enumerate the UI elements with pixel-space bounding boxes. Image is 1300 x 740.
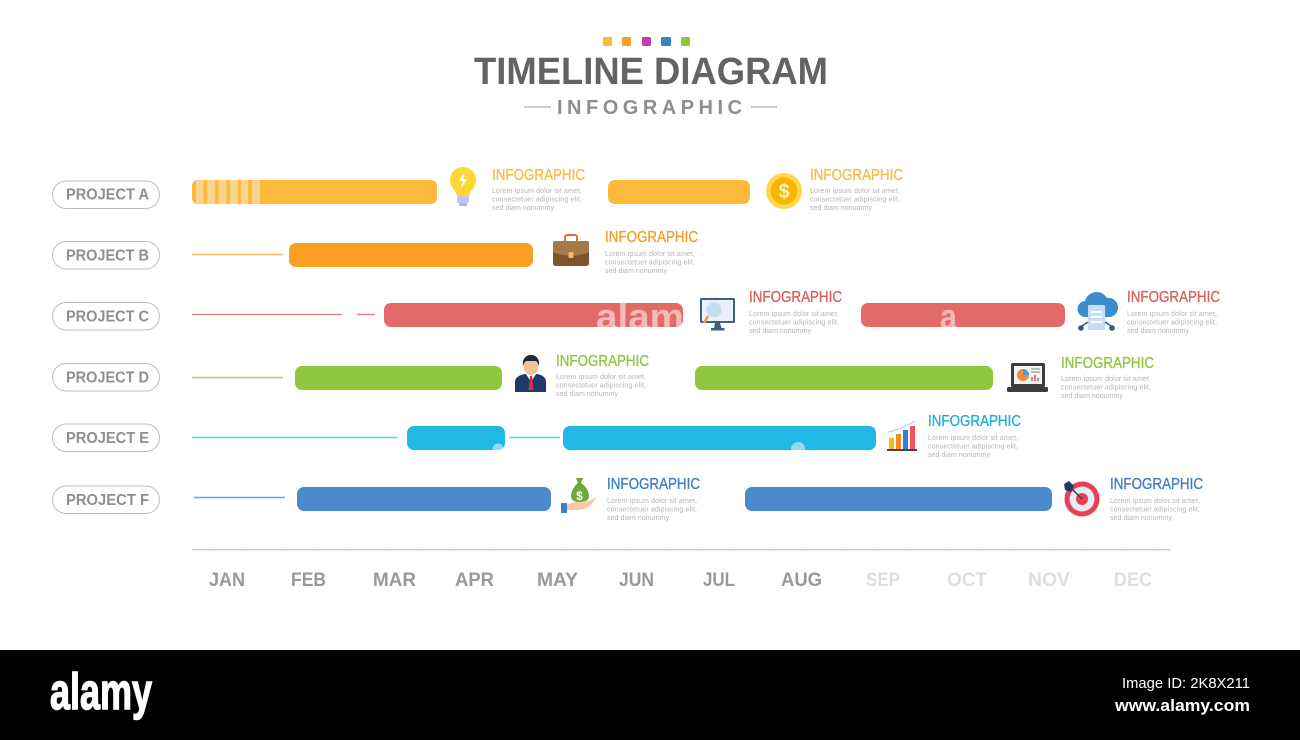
subheading: INFOGRAPHIC <box>557 97 742 119</box>
callout: target: sed diam nonummy <box>1110 515 1172 522</box>
callout: finance: INFOGRAPHIC <box>810 167 903 184</box>
callout: idea: Lorem ipsum dolor sit amet, <box>492 188 582 195</box>
bar: project B <box>289 243 533 267</box>
label: project C <box>52 302 160 330</box>
callout: finance <box>766 167 903 212</box>
month axis: JUN <box>619 570 654 591</box>
callout: target: Lorem ipsum dolor sit amet, <box>1110 498 1200 505</box>
callout: growth: consectetuer adipiscing elit, <box>928 444 1018 450</box>
callout: idea: INFOGRAPHIC <box>492 167 585 184</box>
month axis: SEP <box>866 570 900 591</box>
heading: TIMELINE DIAGRAM <box>474 51 828 93</box>
callout: target: INFOGRAPHIC <box>1110 476 1203 493</box>
label: project A: PROJECT A <box>66 186 149 204</box>
row: project D <box>52 353 1154 400</box>
footer logo: alamy <box>50 663 152 720</box>
icon: briefcase <box>553 235 589 266</box>
callout: monitor: consectetuer adipiscing elit, <box>749 320 839 326</box>
image id: Image ID: 2K8X211 <box>1122 675 1250 692</box>
callout: cloud: Lorem ipsum dolor sit amet, <box>1127 311 1217 318</box>
callout: person <box>515 353 649 398</box>
callout: finance: Lorem ipsum dolor sit amet, <box>810 188 900 195</box>
label: project F <box>52 486 160 514</box>
bar: project D second <box>695 366 993 390</box>
label: project B: PROJECT B <box>66 248 149 264</box>
callout: money: sed diam nonummy <box>607 515 670 522</box>
callout: laptop <box>1007 355 1154 400</box>
bar: project C second: a <box>940 296 958 337</box>
callout: person: Lorem ipsum dolor sit amet, <box>556 374 646 381</box>
month axis: OCT <box>947 570 987 591</box>
month axis: NOV <box>1028 570 1070 591</box>
callout: business <box>553 229 698 275</box>
month axis: MAY <box>537 570 578 591</box>
bar: project A second <box>608 180 750 204</box>
label: project D <box>52 364 160 391</box>
footer band <box>0 650 1300 740</box>
callout: person: sed diam nonummy <box>556 391 618 398</box>
callout: money: Lorem ipsum dolor sit amet, <box>607 498 697 505</box>
callout: laptop: INFOGRAPHIC <box>1061 355 1154 372</box>
website: www.alamy.com <box>1114 696 1250 715</box>
title block <box>474 37 828 119</box>
callout: target <box>1064 476 1203 522</box>
callout: target: consectetuer adipiscing elit, <box>1110 506 1200 514</box>
lead line: project E <box>192 436 560 438</box>
icon: businessman <box>515 355 546 392</box>
label: project E: PROJECT E <box>66 430 149 447</box>
bar: project E second <box>563 426 876 450</box>
callout: money <box>561 476 700 522</box>
bar: project C first <box>384 303 683 327</box>
callout: monitor <box>700 289 842 335</box>
label: project A <box>52 181 160 208</box>
label: project C: PROJECT C <box>66 308 149 326</box>
callout: monitor: INFOGRAPHIC <box>749 289 842 306</box>
callout: growth: Lorem ipsum dolor sit amet, <box>928 435 1018 442</box>
icon: light bulb <box>450 167 476 206</box>
colour dots <box>603 37 690 46</box>
callout: growth: sed diam nonummy <box>928 452 990 459</box>
callout: finance: sed diam nonummy <box>810 205 872 212</box>
icon: growth chart <box>887 421 917 451</box>
callout: laptop: Lorem ipsum dolor sit amet, <box>1061 376 1151 383</box>
icon: laptop <box>1007 363 1048 392</box>
month axis: AUG <box>781 570 822 591</box>
callout: cloud <box>1077 289 1220 335</box>
bar: project D first <box>295 366 502 390</box>
label: project F: PROJECT F <box>66 492 149 509</box>
lead line: project C <box>192 314 375 316</box>
bar: project E first <box>407 426 505 450</box>
callout: money: consectetuer adipiscing elit, <box>607 506 697 514</box>
lead line: project D <box>192 376 283 378</box>
callout: person: INFOGRAPHIC <box>556 353 649 370</box>
callout: business: sed diam nonummy <box>605 268 668 275</box>
bar: project F first <box>297 487 551 511</box>
label: project E <box>52 424 160 452</box>
icon: coin: $ <box>778 181 790 203</box>
callout: idea: sed diam nonummy <box>492 205 554 212</box>
lead line: project B <box>192 254 283 256</box>
icon: cloud document <box>1077 292 1118 331</box>
callout: cloud: INFOGRAPHIC <box>1127 289 1220 306</box>
callout: person: consectetuer adipiscing elit, <box>556 382 646 390</box>
row: project C <box>52 289 1220 337</box>
callout: business: INFOGRAPHIC <box>605 229 698 246</box>
callout: laptop: sed diam nonummy <box>1061 393 1124 400</box>
bar: project F second <box>745 487 1052 511</box>
callout: idea <box>450 167 585 212</box>
callout: business: consectetuer adipiscing elit, <box>605 260 695 266</box>
month axis: DEC <box>1114 570 1152 591</box>
bar: project A first <box>192 180 437 204</box>
callout: laptop: consectetuer adipiscing elit, <box>1061 384 1151 392</box>
callout: growth: INFOGRAPHIC <box>928 413 1021 430</box>
lead line: project F <box>194 496 285 498</box>
bar: project C first: alam <box>596 296 684 337</box>
month axis: APR <box>455 570 494 591</box>
icon: target with dart <box>1064 481 1100 516</box>
callout: cloud: consectetuer adipiscing elit, <box>1127 320 1217 326</box>
row: project F <box>52 476 1203 522</box>
callout: growth <box>887 413 1021 459</box>
callout: cloud: sed diam nonummy <box>1127 328 1190 335</box>
label: project B <box>52 242 160 269</box>
icon: money bag in hand: $ <box>576 489 583 503</box>
row: project A <box>52 167 903 212</box>
row: project E <box>52 413 1021 459</box>
month axis: MAR <box>373 570 416 591</box>
icon: monitor <box>700 298 735 330</box>
row: project B <box>52 229 698 275</box>
bar: project C second <box>861 303 1065 327</box>
month axis: FEB <box>291 570 326 591</box>
callout: finance: consectetuer adipiscing elit, <box>810 196 900 204</box>
callout: monitor: Lorem ipsum dolor sit amet, <box>749 311 839 318</box>
callout: business: Lorem ipsum dolor sit amet, <box>605 251 695 258</box>
callout: monitor: sed diam nonummy <box>749 328 812 335</box>
callout: idea: consectetuer adipiscing elit, <box>492 196 582 204</box>
month axis: JUL <box>703 570 735 591</box>
month axis <box>192 549 1171 591</box>
callout: money: INFOGRAPHIC <box>607 476 700 493</box>
month axis: JAN <box>209 570 245 591</box>
label: project D: PROJECT D <box>66 370 149 386</box>
